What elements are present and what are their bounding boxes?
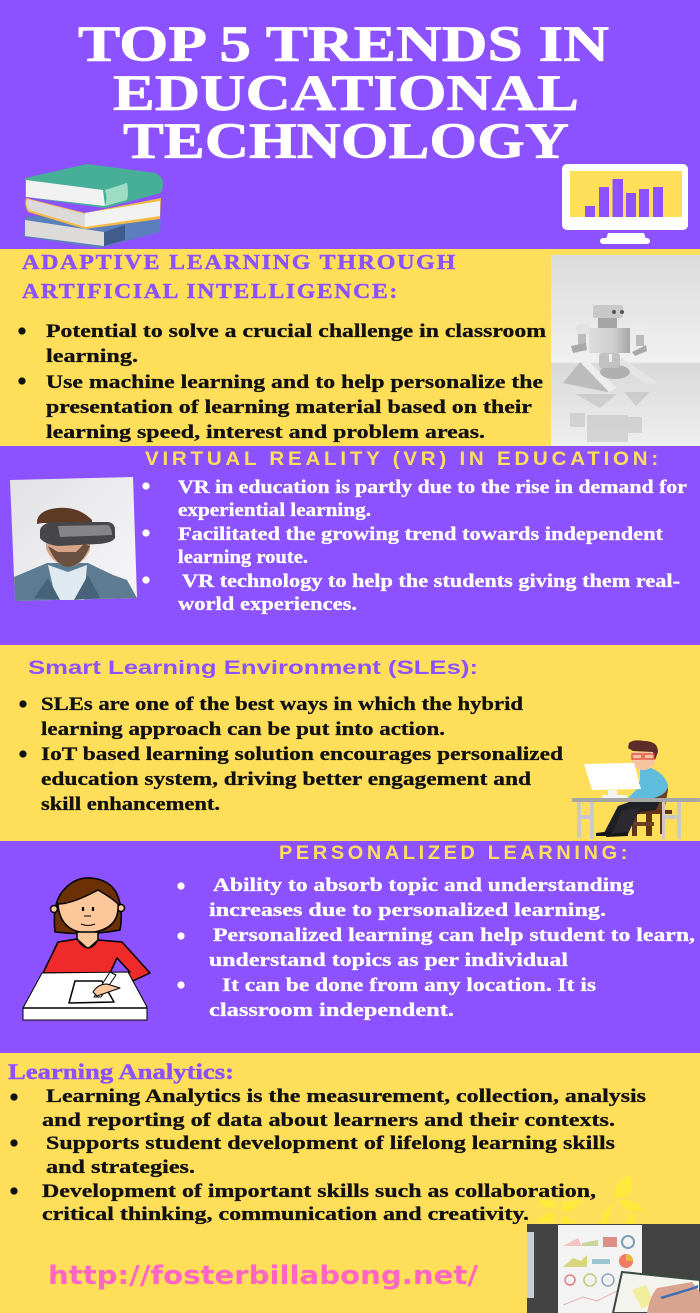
heading: learning analytics: Learning Analytics: <box>8 1059 234 1084</box>
text block: virtual reality bullets: Facilitated the growing trend towards independent <box>178 524 664 545</box>
text block: virtual reality bullets: experiential learning. <box>178 500 371 521</box>
text block: learning analytics bullets: Supports student development of lifelong learning skills <box>46 1133 615 1154</box>
heading: smart learning environment: Smart Learning Environment (SLEs): <box>28 658 478 679</box>
heading: adaptive learning: ARTIFICIAL INTELLIGENCE: <box>22 279 399 303</box>
heading: adaptive learning <box>22 250 457 303</box>
text block: adaptive learning bullets: Use machine learning and to help personalize the <box>46 372 543 393</box>
text block: virtual reality bullets: learning route. <box>178 547 308 568</box>
text block: virtual reality bullets <box>142 477 688 615</box>
text block: smart learning bullets <box>20 694 564 815</box>
image: analytics charts on a desk <box>527 1224 700 1313</box>
text block: smart learning bullets: learning approach can be put into action. <box>41 719 445 740</box>
icon: monitor with bar chart <box>562 164 688 244</box>
text block: personalized learning bullets: increases due to personalized learning. <box>209 900 606 921</box>
image: robot <box>551 255 700 446</box>
icon: man working at desk <box>572 740 700 839</box>
title: TECHNOLOGY <box>123 114 569 170</box>
text block: adaptive learning bullets <box>18 321 546 443</box>
image: man wearing VR headset <box>10 477 137 601</box>
text block: learning analytics bullets: Development of important skills such as collaboration, <box>42 1181 596 1202</box>
text block: adaptive learning bullets: learning speed, interest and problem areas. <box>46 422 485 443</box>
text block: adaptive learning bullets: Potential to solve a crucial challenge in classroom <box>46 321 546 342</box>
text block: learning analytics bullets: and reporting of data about learners and their contexts. <box>42 1110 615 1131</box>
text block: learning analytics bullets: Learning Analytics is the measurement, collection, analysis <box>46 1086 646 1107</box>
text block: personalized learning bullets <box>178 875 695 1021</box>
title: EDUCATIONAL <box>113 66 579 122</box>
title <box>78 17 609 170</box>
text block: personalized learning bullets: classroom independent. <box>209 1000 454 1021</box>
heading: adaptive learning: ADAPTIVE LEARNING THROUGH <box>22 250 457 274</box>
heading: personalized learning: PERSONALIZED LEARNING: <box>279 843 631 864</box>
text block: learning analytics bullets <box>10 1086 646 1225</box>
website url: http://fosterbillabong.net/ <box>48 1261 479 1291</box>
text block: smart learning bullets: education system, driving better engagement and <box>41 769 532 790</box>
text block: virtual reality bullets: VR in education is partly due to the rise in demand for <box>178 477 688 498</box>
text block: adaptive learning bullets: presentation of learning material based on their <box>46 397 533 418</box>
heading: virtual reality: VIRTUAL REALITY (VR) IN EDUCATION: <box>145 449 662 470</box>
text block: learning analytics bullets: critical thinking, communication and creativity. <box>42 1204 529 1225</box>
icon: stack of books <box>24 164 163 248</box>
text block: personalized learning bullets: Personalized learning can help student to learn, <box>213 925 695 946</box>
text block: adaptive learning bullets: learning. <box>46 346 138 367</box>
title: TOP 5 TRENDS IN <box>78 17 609 73</box>
icon: student writing at desk <box>23 878 150 1020</box>
text block: smart learning bullets: skill enhancement. <box>41 794 220 815</box>
text block: learning analytics bullets: and strategies. <box>46 1157 195 1178</box>
text block: virtual reality bullets: VR technology to help the students giving them real- <box>182 571 680 592</box>
text block: personalized learning bullets: Ability to absorb topic and understanding <box>213 875 635 896</box>
decoration: yellow flower <box>537 1175 643 1224</box>
text block: personalized learning bullets: understand topics as per individual <box>209 950 568 971</box>
text block: smart learning bullets: SLEs are one of the best ways in which the hybrid <box>41 694 524 715</box>
text block: virtual reality bullets: world experiences. <box>178 594 357 615</box>
text block: smart learning bullets: IoT based learning solution encourages personalized <box>41 744 564 765</box>
text block: personalized learning bullets: It can be done from any location. It is <box>222 975 596 996</box>
